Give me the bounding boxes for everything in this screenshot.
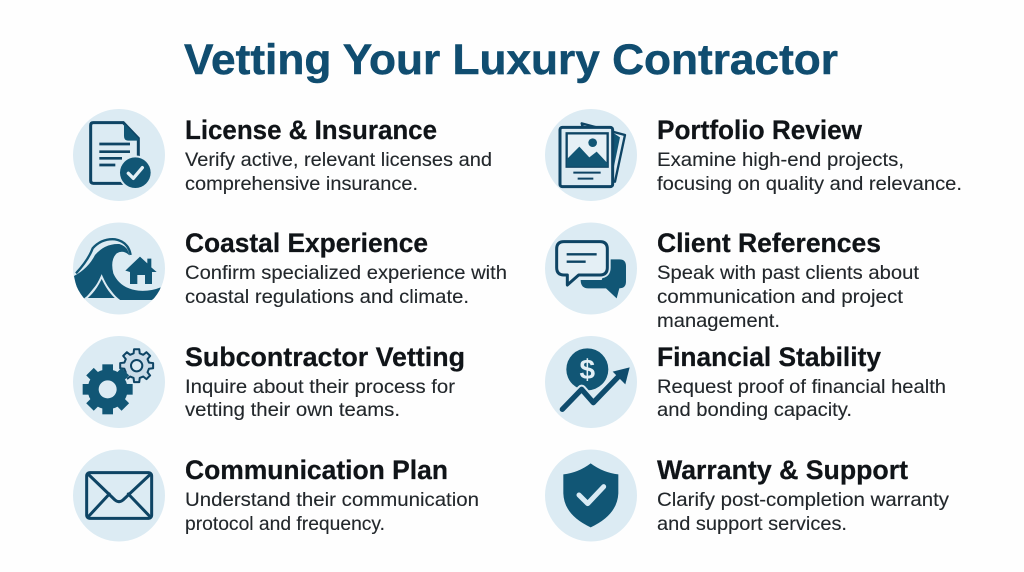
description <box>185 376 456 421</box>
icon: chat bubbles <box>545 222 637 314</box>
icon: wave and house <box>73 222 165 314</box>
description: Verify active, relevant licenses and <box>185 149 492 171</box>
panel: warranty and support <box>545 450 949 542</box>
icon: dollar coin and rising arrow <box>545 336 637 428</box>
heading: Warranty & Support <box>657 455 908 485</box>
icon: envelope <box>73 450 165 542</box>
description: coastal regulations and climate. <box>185 286 469 308</box>
description: focusing on quality and relevance. <box>657 173 962 195</box>
description <box>185 489 479 535</box>
description <box>657 376 946 421</box>
panel: client references <box>545 222 920 332</box>
heading: Subcontractor Vetting <box>185 342 465 372</box>
description: Understand their communication <box>185 489 479 511</box>
description: comprehensive insurance. <box>185 173 418 195</box>
panel: license and insurance <box>73 109 492 201</box>
description <box>185 262 507 308</box>
heading: Communication Plan <box>185 455 448 485</box>
icon: photo stack <box>545 109 637 201</box>
description: Clarify post-completion warranty <box>657 489 949 511</box>
description <box>657 489 949 535</box>
description: vetting their own teams. <box>185 399 400 421</box>
description <box>185 149 492 195</box>
panel: financial stability <box>545 336 946 428</box>
description: protocol and frequency. <box>185 513 385 535</box>
description <box>657 149 962 195</box>
description: Confirm specialized experience with <box>185 262 507 284</box>
description: Examine high-end projects, <box>657 149 904 171</box>
heading: Coastal Experience <box>185 228 428 258</box>
description: Request proof of financial health <box>657 376 946 398</box>
icon: document with check <box>73 109 165 201</box>
panel: subcontractor vetting <box>73 336 465 428</box>
description: management. <box>657 310 780 332</box>
description: communication and project <box>657 286 904 308</box>
description <box>657 262 920 332</box>
heading: Portfolio Review <box>657 115 863 145</box>
heading: License & Insurance <box>185 115 437 145</box>
description: Speak with past clients about <box>657 262 920 284</box>
icon: gears <box>73 336 165 428</box>
description: Inquire about their process for <box>185 376 456 398</box>
icon: shield with check <box>545 450 637 542</box>
icon: dollar coin and rising arrow: $ <box>580 354 596 385</box>
title: Vetting Your Luxury Contractor <box>184 36 838 84</box>
panel: coastal experience <box>73 222 507 314</box>
description: and support services. <box>657 513 847 535</box>
heading: Client References <box>657 228 881 258</box>
heading: Financial Stability <box>657 342 881 372</box>
panel: portfolio review <box>545 109 962 201</box>
description: and bonding capacity. <box>657 399 852 421</box>
panel: communication plan <box>73 450 479 542</box>
